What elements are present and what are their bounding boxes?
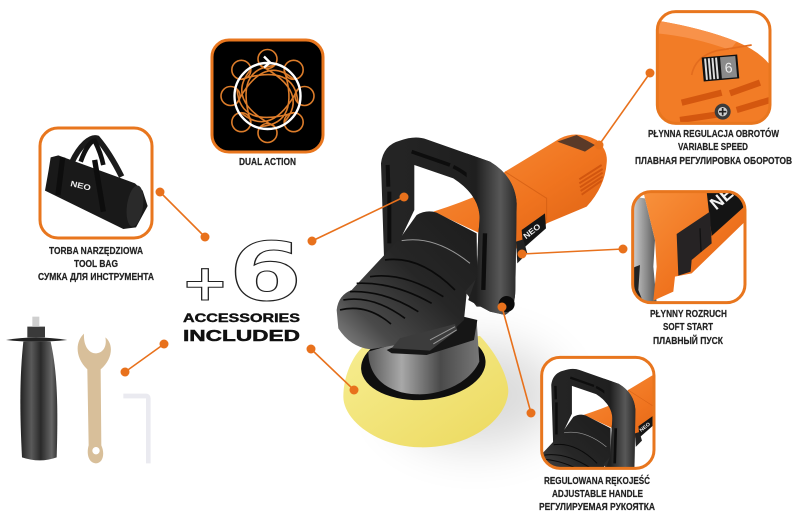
- label: soft start: [650, 309, 727, 347]
- accessories included heading: ACCESSORIES: [183, 313, 300, 325]
- icon: soft shadow under polisher: [390, 343, 560, 447]
- callout: plus six accessories: [181, 226, 302, 345]
- orange motor body: [433, 135, 607, 263]
- arrow: variable speed connector: [594, 68, 654, 150]
- icon: wrench: [78, 334, 111, 463]
- label: tool bag: TORBA NARZĘDZIOWA: [49, 246, 143, 257]
- polisher product image: [337, 135, 607, 447]
- foam polishing pad: [343, 336, 508, 447]
- frame: [542, 357, 654, 468]
- label: soft start: PŁYNNY ROZRUCH: [650, 309, 727, 320]
- arrow: handle connector: [308, 192, 408, 246]
- handle close-up: [543, 360, 652, 467]
- label: soft start: ПЛАВНЫЙ ПУСК: [653, 334, 724, 347]
- label: tool bag: TOOL BAG: [74, 259, 118, 270]
- panel: soft start: [633, 183, 745, 303]
- icon: black tool bag: [45, 138, 148, 229]
- frame: [657, 12, 770, 123]
- label: variable speed: [635, 127, 792, 167]
- arrow: tool bag connector: [156, 188, 210, 242]
- tool body, handle and head: [337, 135, 607, 355]
- panel: dual action icon: [212, 40, 323, 168]
- metal cup: [368, 320, 479, 394]
- right handle arm in front of head: [381, 137, 517, 315]
- bag logo: NEO: [70, 179, 92, 193]
- panel: adjustable handle: [540, 356, 656, 470]
- label: soft start: SOFT START: [663, 322, 713, 333]
- backing ring: [359, 326, 488, 404]
- label: variable speed: VARIABLE SPEED: [678, 142, 748, 153]
- polisher head: [337, 211, 477, 351]
- icon: side handle: [6, 317, 67, 460]
- label: dual action: DUAL ACTION: [239, 157, 296, 168]
- switch close-up: NE: [706, 183, 737, 214]
- label: adjustable handle: ADJUSTABLE HANDLE: [552, 489, 643, 500]
- white rotation ring with arrow: [234, 56, 300, 129]
- frame: [40, 128, 152, 238]
- label: tool bag: [38, 246, 154, 283]
- arrow: pad connector: [306, 344, 358, 394]
- panel: included accessories: [6, 317, 148, 463]
- label: adjustable handle: REGULOWANA RĘKOJEŚĆ: [544, 474, 650, 487]
- label: adjustable handle: РЕГУЛИРУЕМАЯ РУКОЯТКА: [539, 502, 655, 513]
- arrow: accessories connector: [120, 340, 168, 376]
- outlined plus six: [181, 226, 302, 319]
- dark neck under head: [387, 317, 477, 355]
- orbit rosette: [216, 45, 319, 147]
- orange motor body: NEO: [522, 222, 542, 241]
- pivot knob: [465, 277, 488, 307]
- panel: variable speed: [657, 12, 770, 123]
- label: tool bag: СУМКА ДЛЯ ИНСТРУМЕНТА: [38, 272, 154, 283]
- D-handle: [381, 137, 517, 315]
- accessories included heading: INCLUDED: [183, 328, 300, 345]
- panel: tool bag: [38, 128, 154, 283]
- accessories included heading: [183, 313, 300, 345]
- icon frame: [212, 40, 323, 152]
- outlined plus six: 6: [229, 226, 302, 319]
- speed dial close-up: 6: [724, 59, 733, 76]
- arrow: soft start connector: [518, 244, 628, 258]
- arrow: adjustable handle connector: [498, 302, 536, 418]
- frame: [633, 192, 745, 303]
- label: adjustable handle: [539, 474, 655, 513]
- outlined plus six: +: [181, 254, 229, 312]
- icon: hex key: [123, 396, 148, 463]
